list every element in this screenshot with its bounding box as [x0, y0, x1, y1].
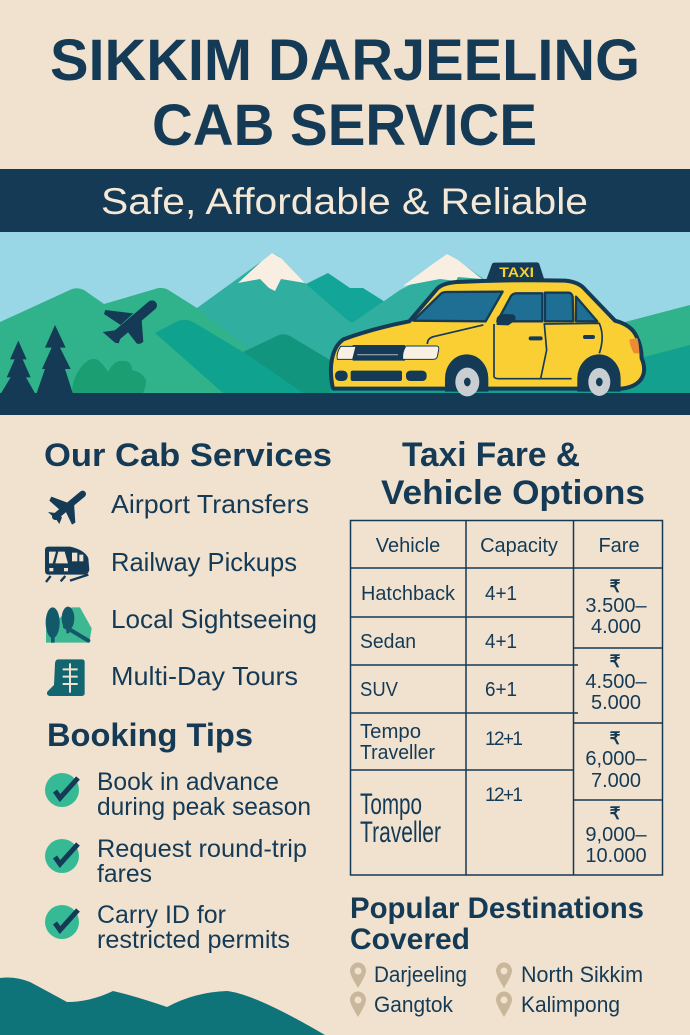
destination: north sikkim: North Sikkim: [521, 962, 643, 987]
vehicle column: Hatchback: [361, 583, 456, 605]
vehicle column: [360, 583, 456, 849]
fare column: 10.000: [585, 845, 647, 867]
service: multi-day tours: [47, 659, 298, 696]
vehicle column: Traveller: [360, 742, 435, 764]
table header: Capacity: [480, 535, 558, 557]
fare column: ₹: [610, 804, 621, 823]
windows: [413, 292, 503, 321]
capacity column: 4+1: [485, 631, 517, 653]
illustration: mountain scene with taxi: [0, 232, 690, 415]
service: airport transfers: Airport Transfers: [111, 489, 309, 519]
table header: Vehicle: [376, 535, 440, 557]
fare column: 9,000–: [585, 824, 647, 846]
heading: Booking Tips: [47, 717, 253, 753]
destination: kalimpong: Kalimpong: [521, 992, 620, 1017]
fare column: 5.000: [591, 692, 641, 714]
tip: carry id: restricted permits: [97, 926, 290, 954]
road: [0, 393, 690, 415]
tip: book in advance: Book in advance: [97, 768, 279, 796]
vehicle column: Tompo: [360, 788, 422, 821]
fare column: ₹: [610, 652, 621, 671]
panel: taxi fare and vehicle options: [350, 436, 663, 875]
front lights and grille: [353, 345, 405, 361]
tip: book in advance: [45, 768, 311, 821]
tip: carry id: Carry ID for: [97, 901, 226, 929]
title: CAB SERVICE: [152, 93, 537, 158]
heading: Taxi Fare &: [402, 436, 580, 474]
capacity column: 12+1: [485, 785, 523, 806]
heading: Our Cab Services: [44, 437, 332, 473]
wheels: [445, 354, 621, 396]
panel: popular destinations: [350, 892, 644, 1017]
fare table: [350, 520, 663, 875]
decorative hills: [0, 978, 325, 1035]
destination: darjeeling: Darjeeling: [374, 962, 467, 987]
icon: airplane: [103, 305, 152, 344]
table header: Fare: [598, 535, 640, 557]
panel: taxi fare and vehicle options: Vehicle Options: [381, 474, 645, 512]
service: railway pickups: Railway Pickups: [111, 547, 297, 577]
service: local sightseeing: [46, 604, 317, 643]
trees: [0, 325, 73, 395]
panel: our cab services: [44, 437, 332, 696]
panel: popular destinations: Covered: [350, 923, 470, 956]
capacity column: 6+1: [485, 679, 517, 701]
mountains: [0, 253, 690, 393]
tip: round-trip fares: fares: [97, 860, 152, 888]
destination: gangtok: Gangtok: [374, 992, 454, 1017]
vehicle column: Tempo: [360, 721, 421, 743]
panel: booking tips: [45, 717, 311, 954]
car body: [331, 280, 644, 389]
subtitle banner: [0, 169, 690, 232]
fare column: ₹: [610, 729, 621, 748]
taxi: [331, 262, 644, 396]
fare column: ₹: [610, 577, 621, 596]
tail light: [629, 338, 639, 353]
tip: round-trip fares: [45, 835, 307, 888]
fare column: 6,000–: [585, 748, 647, 770]
title: [50, 28, 640, 158]
service: local sightseeing: Local Sightseeing: [111, 604, 317, 634]
tip: round-trip fares: Request round-trip: [97, 835, 307, 863]
tip: book in advance: during peak season: [97, 793, 311, 821]
service: airport transfers: [48, 489, 309, 525]
fare column: 4.000: [591, 616, 641, 638]
roof sign: TAXI: [499, 265, 534, 280]
vehicle column: SUV: [360, 679, 399, 701]
tip: carry id: [45, 901, 290, 954]
heading: Popular Destinations: [350, 892, 644, 925]
door lines: [427, 323, 602, 379]
fare column: [585, 577, 647, 867]
title: SIKKIM DARJEELING: [50, 28, 640, 93]
fare column: 7.000: [591, 770, 641, 792]
fare column: 3.500–: [585, 595, 647, 617]
vehicle column: Sedan: [360, 631, 416, 653]
roof sign: [486, 262, 545, 281]
service: multi-day tours: Multi-Day Tours: [111, 661, 298, 691]
vehicle column: Traveller: [360, 816, 441, 849]
capacity column: 12+1: [485, 729, 523, 750]
subtitle banner: Safe, Affordable & Reliable: [101, 181, 588, 222]
capacity column: [485, 583, 523, 806]
capacity column: 4+1: [485, 583, 517, 605]
service: railway pickups: [45, 547, 297, 582]
fare column: 4.500–: [585, 671, 647, 693]
table header: [376, 535, 640, 557]
